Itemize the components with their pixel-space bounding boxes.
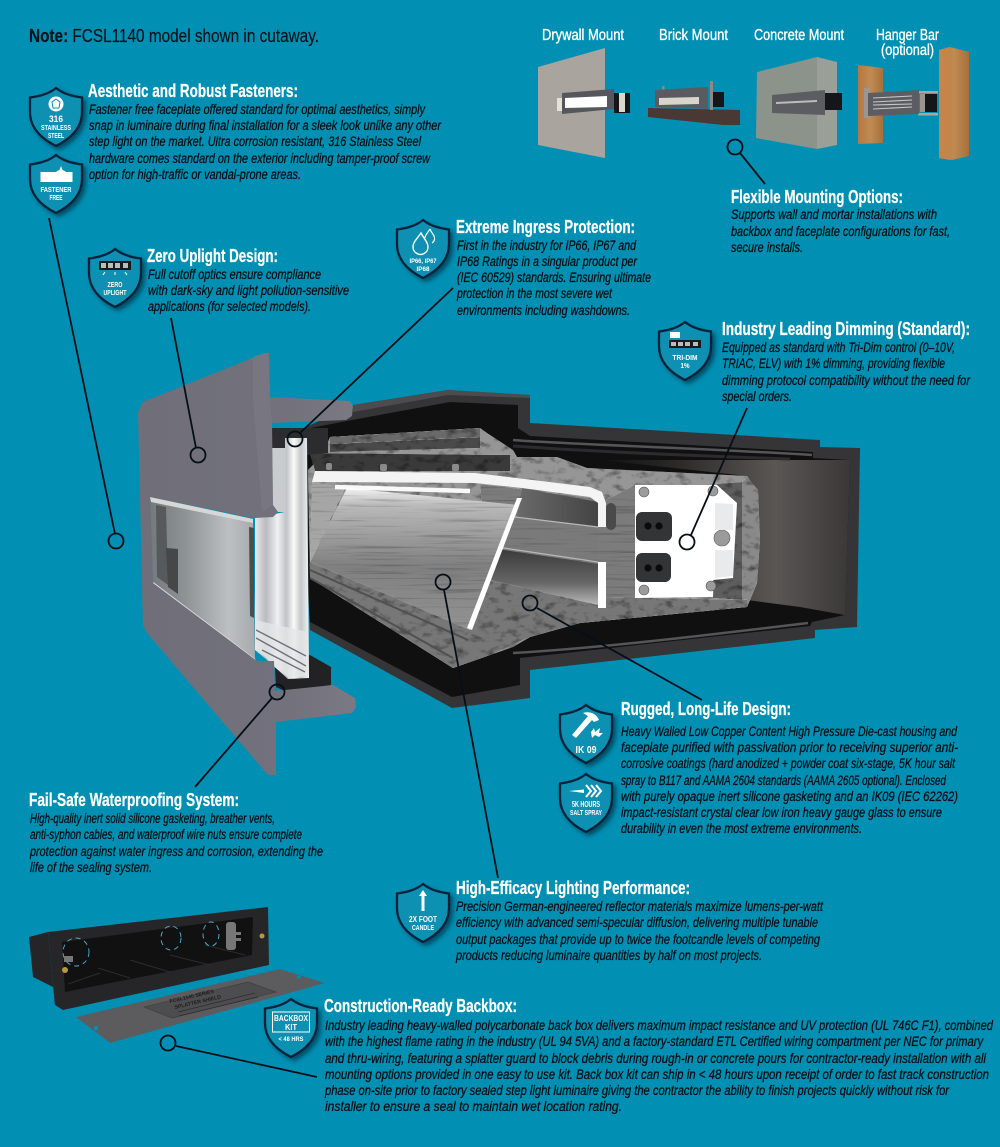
efficacy marker: [436, 574, 498, 878]
body text: [722, 340, 970, 404]
badge: backbox kit: KIT: [285, 1022, 298, 1032]
fasteners marker: [49, 218, 124, 548]
concrete mount: [756, 57, 842, 149]
body text: installer to ensure a seal to maintain wet location rating.: [325, 1099, 622, 1114]
metal extrusion cut surface: [308, 428, 758, 668]
badge: fastener free: [30, 155, 82, 213]
body text: efficiency with advanced semi-specular diffusion, delivering multiple tunable: [456, 915, 818, 930]
body text: products reducing luminaire quantities by half on most projects.: [455, 948, 762, 963]
heading: High-Efficacy Lighting Performance:: [456, 878, 690, 898]
housing: [300, 390, 860, 708]
badge: 2X foot candle: [397, 884, 449, 942]
block: waterproofing: [29, 790, 323, 875]
body text: Full cutoff optics ensure compliance: [148, 267, 321, 282]
step light cutaway: [138, 353, 860, 775]
block: dimming: [659, 319, 970, 404]
callout lines and markers: [49, 140, 765, 1077]
body text: snap in luminaire during final installation for a sleek look unlike any other: [89, 118, 441, 133]
faceplate bevel: [253, 353, 273, 512]
heading: Flexible Mounting Options:: [731, 187, 903, 207]
body text: with dark-sky and light pollution-sensitive: [148, 283, 349, 298]
block: aesthetic fasteners: [30, 81, 441, 213]
body text: special orders.: [722, 389, 792, 404]
body text: Supports wall and mortar installations with: [731, 207, 937, 222]
terminals: [62, 922, 264, 973]
body text: IP68 Ratings in a singular product per: [457, 254, 637, 269]
hanger bar mount: [858, 47, 969, 160]
badge: backbox kit: < 48 HRS: [278, 1036, 304, 1043]
badge: 5K hours salt spray: SALT SPRAY: [570, 810, 602, 817]
rugged marker: [522, 596, 702, 700]
body text: First in the industry for IP66, IP67 and: [457, 238, 636, 253]
body text: Fastener free faceplate offered standard for optimal aesthetics, simply: [89, 102, 426, 117]
gasket: [272, 428, 331, 692]
body text: protection against water ingress and corrosion, extending the: [29, 844, 323, 859]
badge: backbox kit: BACKBOX: [274, 1013, 308, 1023]
body text: Precision German-engineered reflector materials maximize lumens-per-watt: [456, 899, 824, 914]
body text: faceplate purified with passivation prior to receiving superior anti-: [621, 740, 958, 755]
knockouts: [63, 922, 219, 966]
badge: fastener free: FREE: [50, 193, 62, 202]
body text: (IEC 60529) standards. Ensuring ultimate: [457, 270, 651, 285]
front glass window: [150, 497, 255, 661]
body text: life of the sealing system.: [30, 860, 152, 875]
block: flexible mounting: [731, 187, 950, 255]
badge: 5K hours salt spray: [560, 774, 612, 832]
mount labels: Concrete Mount: [754, 27, 845, 44]
body text: [89, 102, 441, 182]
mount labels: [542, 27, 939, 59]
badge: zero uplight: ZERO: [108, 280, 123, 289]
badge: IP ratings: IP68: [416, 266, 430, 273]
waterproofing marker: [195, 684, 284, 787]
end cap gasket: [742, 477, 760, 607]
body text: anti-syphon cables, and waterproof wire nuts ensure complete: [30, 827, 302, 842]
block: efficacy: [397, 878, 824, 963]
interior floor ribs: [68, 945, 245, 984]
backbox image: [29, 907, 325, 1043]
extrusion strata: [310, 428, 510, 471]
body text: [455, 899, 824, 963]
badge: IK 09: [560, 705, 612, 763]
body text: option for high-traffic or vandal-prone areas.: [89, 167, 301, 182]
heading: Fail-Safe Waterproofing System:: [29, 790, 239, 810]
block: ingress protection: [397, 217, 651, 318]
badge: tri-dim: 1%: [680, 363, 690, 370]
badge: 316 stainless steel: STAINLESS: [41, 125, 71, 132]
heading: Extreme Ingress Protection:: [456, 217, 635, 237]
badge: IP ratings: IP66, IP67: [410, 258, 437, 265]
body text: hardware comes standard on the exterior including tamper-proof screw: [89, 151, 431, 166]
faceplate: [138, 353, 356, 775]
body text: environments including washdowns.: [457, 303, 630, 318]
inner frame strip: [270, 448, 285, 512]
badge: IK 09: IK 09: [576, 745, 597, 756]
drywall mount: [538, 48, 630, 158]
body text: [456, 238, 651, 318]
badge: zero uplight: UPLIGHT: [104, 288, 127, 297]
ingress marker: [288, 288, 453, 446]
mount options images: [538, 27, 969, 160]
splatter shield lid: [76, 969, 325, 1043]
channel walls: [480, 484, 635, 605]
driver end plate: [635, 482, 742, 600]
body text: durability in even the most extreme environments.: [621, 821, 862, 836]
badge: zero uplight: [89, 249, 141, 307]
badge: 316 stainless steel: 316: [49, 114, 63, 124]
heading: Construction-Ready Backbox:: [324, 996, 517, 1016]
badge: 5K hours salt spray: 5K HOURS: [572, 800, 600, 809]
body text: backbox and faceplate configurations for fast,: [731, 224, 950, 239]
reflector: [310, 482, 522, 630]
mount labels: Hanger Bar: [876, 27, 939, 44]
glass column: [255, 438, 309, 679]
backbox marker: [160, 1036, 317, 1077]
body text: output packages that provide up to twice the footcandle levels of competing: [456, 932, 820, 947]
heading: Zero Uplight Design:: [147, 246, 278, 266]
badge: 2X foot candle: 2X FOOT: [409, 914, 438, 924]
mount labels: (optional): [881, 42, 934, 59]
body text: step light on the market. Ultra corrosion resistant, 316 Stainless Steel: [89, 134, 422, 149]
body text: [29, 811, 323, 875]
brick mount: [648, 81, 740, 125]
mount labels: Brick Mount: [659, 27, 729, 44]
badge: IP ratings: [397, 220, 449, 278]
body text: [621, 724, 958, 836]
body text: applications (for selected models).: [148, 299, 311, 314]
badge: 316 stainless steel: [30, 88, 82, 146]
heading: Rugged, Long-Life Design:: [621, 699, 791, 719]
white rail: [312, 471, 606, 608]
splatter shield lid: FCSL1140 SERIES: [169, 989, 215, 1005]
mount labels: Drywall Mount: [542, 27, 625, 44]
mounting marker: [728, 140, 765, 184]
block: construction-ready backbox: [265, 996, 993, 1114]
badge: tri-dim: [659, 322, 711, 380]
badge: tri-dim: TRI-DIM: [672, 353, 698, 362]
box body: [48, 907, 269, 1010]
body text: protection in the most severe wet: [456, 286, 613, 301]
box side: [29, 932, 55, 1005]
body text: secure installs.: [731, 240, 803, 255]
block: rugged design: [560, 699, 958, 836]
body text: [731, 207, 950, 255]
badge: 2X foot candle: CANDLE: [412, 925, 434, 932]
box interior: [62, 917, 253, 992]
note: Note: FCSL1140 model shown in cutaway.: [29, 26, 319, 46]
heading: Aesthetic and Robust Fasteners:: [88, 81, 298, 101]
lower extrusion bars: [310, 562, 747, 668]
badge: 316 stainless steel: STEEL: [48, 133, 65, 140]
block: zero uplight: [89, 246, 349, 314]
badge: backbox kit: [265, 999, 317, 1057]
body text: [324, 1018, 993, 1114]
badge: fastener free: FASTENER: [40, 185, 72, 194]
splatter shield lid: SPLATTER SHIELD: [174, 994, 222, 1011]
body text: [148, 267, 349, 314]
body text: High-quality inert solid silicone gasketing, breather vents,: [30, 811, 275, 826]
zero uplight marker: [171, 318, 206, 462]
dimming marker: [680, 408, 747, 550]
